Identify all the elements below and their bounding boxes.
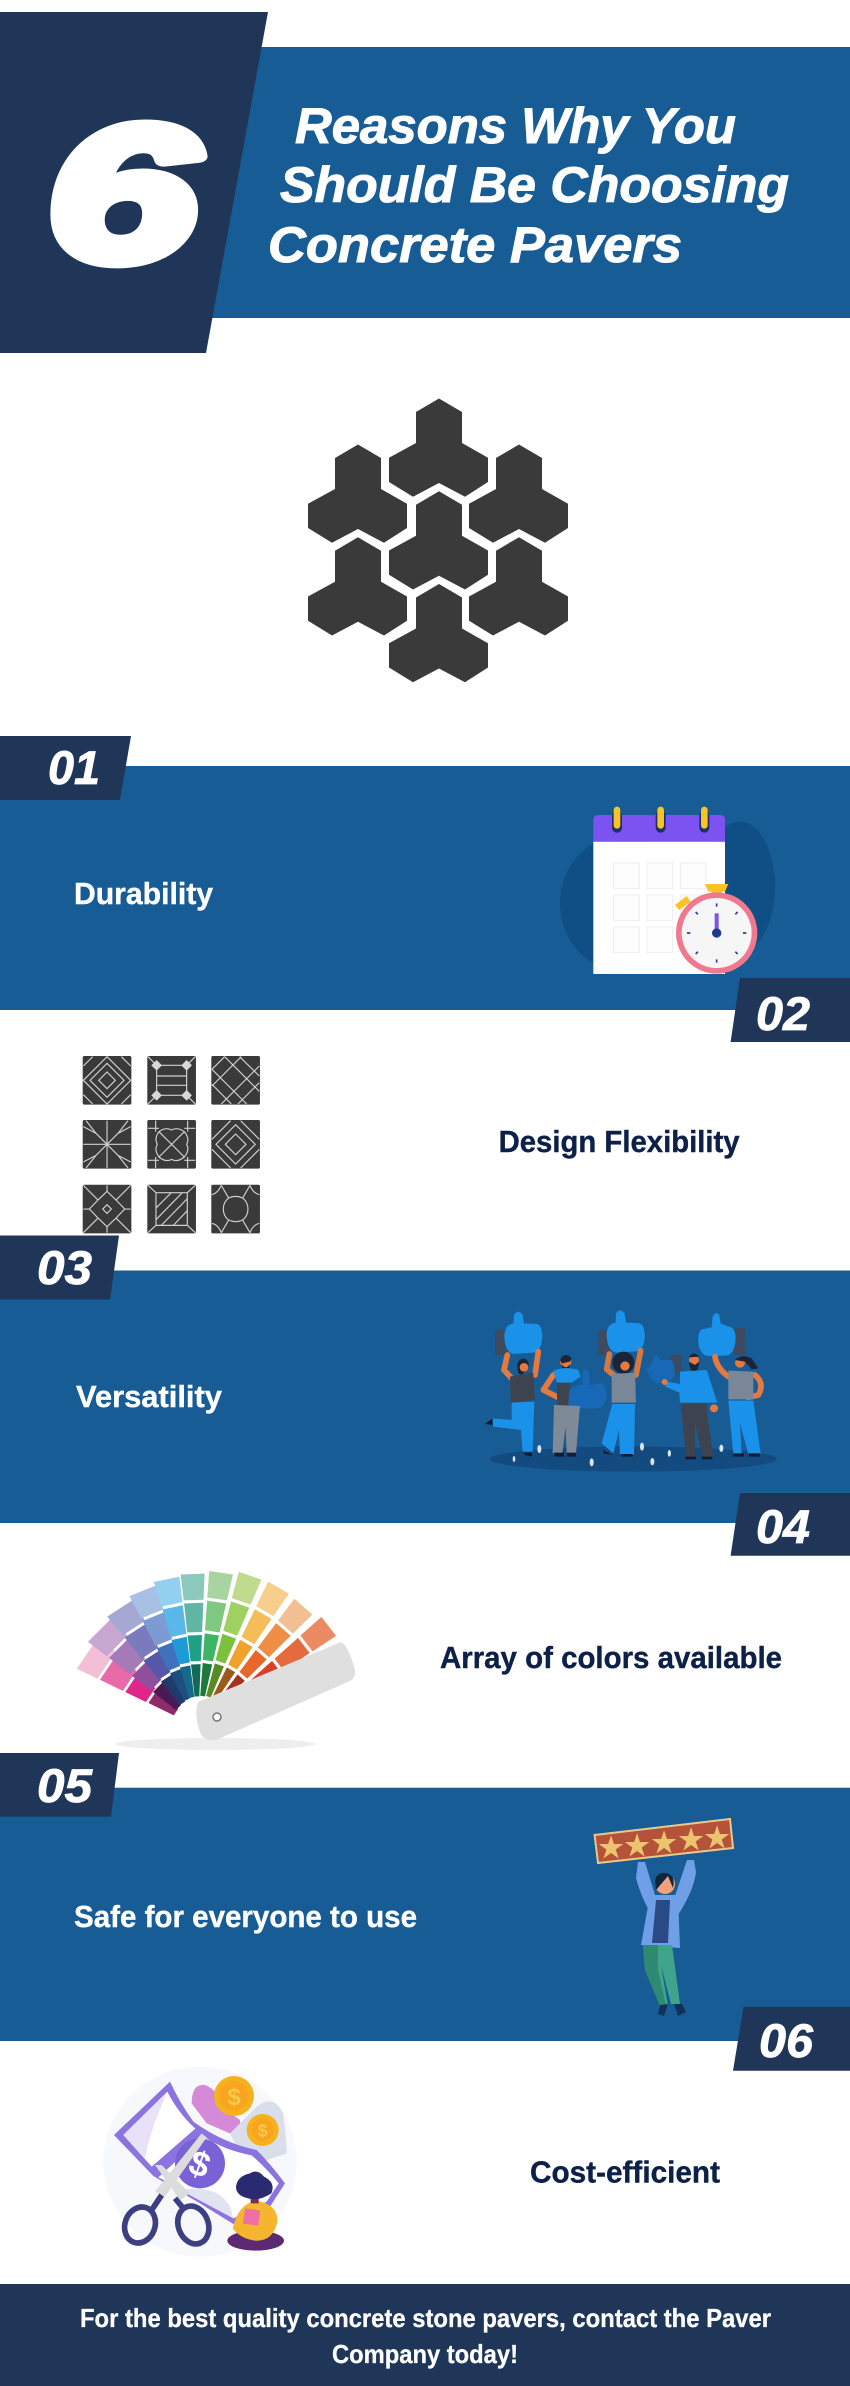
- footer text: [80, 2303, 771, 2369]
- illustration: scissors cutting money: [103, 2067, 297, 2257]
- small white plants: [513, 1443, 723, 1466]
- header: [0, 12, 850, 353]
- icon: calendar and stopwatch: [560, 807, 775, 974]
- dark number panel: [0, 12, 268, 353]
- heading: Durability: Durability: [74, 876, 214, 911]
- heading: Safe for everyone to use: Safe for everyone to use: [74, 1899, 417, 1934]
- tag 04: 04: [756, 1500, 810, 1553]
- illustration: people holding thumbs up: [485, 1310, 777, 1472]
- person 2: [543, 1355, 607, 1457]
- person 3: [598, 1310, 645, 1457]
- illustration: person holding star rating: ★: [678, 1824, 704, 1855]
- heading: Versatility: Versatility: [76, 1379, 223, 1414]
- tag 02: 02: [756, 987, 810, 1040]
- tag 02: [731, 978, 850, 1042]
- panel: design flexibility: [83, 1056, 740, 1233]
- icon: nine patterned tiles: [83, 1056, 260, 1233]
- tag 04: [731, 1493, 850, 1556]
- illustration: person holding star rating: ★: [598, 1832, 624, 1863]
- title: [268, 98, 789, 273]
- footer text: For the best quality concrete stone pavers, contact the Paver: [80, 2303, 771, 2333]
- illustration: scissors cutting money: $: [184, 2143, 215, 2186]
- tag 03: [0, 1236, 119, 1300]
- panel: array of colors: [77, 1571, 782, 1750]
- person 1: [485, 1312, 542, 1457]
- heading: Array of colors available: Array of colors available: [440, 1640, 782, 1675]
- footer text: Company today!: [332, 2339, 518, 2369]
- title: Concrete Pavers: [268, 217, 682, 273]
- big number 6: 6: [47, 86, 199, 301]
- tag 06: [733, 2007, 850, 2071]
- tag 01: 01: [48, 741, 100, 794]
- illustration: person holding star rating: ★: [651, 1827, 677, 1858]
- tag 05: [0, 1753, 119, 1817]
- person 5: [698, 1313, 761, 1457]
- band: [0, 766, 850, 1010]
- band: [0, 1788, 850, 2041]
- tag 06: 06: [759, 2014, 814, 2067]
- illustration: colour fan: [77, 1571, 355, 1750]
- tag 05: 05: [37, 1759, 93, 1812]
- title: Reasons Why You: [295, 98, 736, 154]
- heading: Design Flexibility: Design Flexibility: [499, 1124, 740, 1159]
- heading: Cost-efficient: Cost-efficient: [530, 2155, 720, 2190]
- tag 01: [0, 736, 131, 800]
- footer: [0, 2284, 850, 2386]
- panel: safe for everyone: [0, 1788, 850, 2041]
- band: [0, 1270, 850, 1523]
- panel: durability: [0, 766, 850, 1010]
- illustration: scissors cutting money: $: [258, 2121, 268, 2141]
- icon: hexagonal paver tiles: [308, 398, 568, 682]
- header band: [0, 47, 850, 318]
- person 4: [647, 1353, 718, 1459]
- illustration: person holding star rating: [595, 1819, 733, 2016]
- tag 03: 03: [37, 1241, 92, 1294]
- panel: versatility: [0, 1270, 850, 1523]
- title: Should Be Choosing: [280, 157, 789, 213]
- illustration: person holding star rating: ★: [704, 1822, 730, 1853]
- illustration: scissors cutting money: $: [227, 2084, 241, 2111]
- illustration: person holding star rating: ★: [624, 1830, 650, 1861]
- panel: cost-efficient: [103, 2067, 720, 2257]
